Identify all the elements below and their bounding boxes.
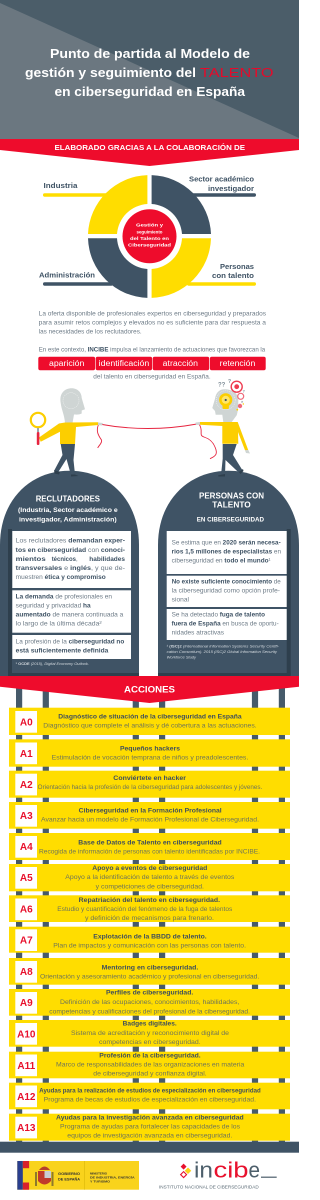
label: Sector académico investigador: Sector académico bbox=[189, 175, 254, 184]
action A2 bbox=[9, 771, 290, 798]
text box: undefined profession bbox=[12, 635, 131, 659]
heading: personas con talento: TALENTO bbox=[212, 500, 251, 510]
head bbox=[60, 388, 85, 423]
action A5: Apoyo a eventos de ciberseguridad bbox=[92, 865, 207, 872]
action A8: Orientación y asesoramiento académico y profesional en ciberseguridad. bbox=[40, 974, 260, 981]
text box: growing demand: aumentado de manera continuada a bbox=[16, 612, 124, 619]
action A12 bbox=[9, 1083, 290, 1109]
action A7: Plan de impactos y comunicación con las personas con talento. bbox=[53, 942, 246, 949]
label: Sector académico investigador: investigador bbox=[208, 184, 254, 193]
figure: talent with lightbulb: ? bbox=[242, 388, 246, 394]
ladder strips behind actions bbox=[16, 686, 285, 1142]
text box: demand: muestren ética y compromiso bbox=[16, 574, 106, 581]
label: Administración bbox=[39, 271, 113, 286]
action A5 bbox=[9, 864, 290, 891]
label: Personas con talento: Personas bbox=[220, 262, 254, 271]
action A2: A2 bbox=[20, 780, 33, 791]
action A9: competencias y cualificaciones del profesional de la ciberseguridad. bbox=[49, 1008, 250, 1015]
logo: incibe bbox=[159, 1158, 277, 1191]
label: Industria: Industria bbox=[44, 181, 78, 190]
donut diagram bbox=[88, 175, 211, 298]
heading: reclutadores: RECLUTADORES bbox=[36, 494, 100, 504]
heading: reclutadores bbox=[18, 494, 118, 523]
heading: personas con talento: EN CIBERSEGURIDAD bbox=[197, 517, 264, 524]
logo: incibe: cib bbox=[214, 1158, 248, 1183]
action A7: A7 bbox=[20, 936, 33, 946]
text box: demand bbox=[12, 531, 131, 588]
action A10: Badges digitales. bbox=[123, 1021, 177, 1028]
heading: personas con talento: PERSONAS CON bbox=[199, 490, 264, 500]
action A3: Avanzar hacia un modelo de Formación Profesional de Ciberseguridad. bbox=[41, 817, 259, 824]
title: en ciberseguridad en España bbox=[54, 84, 246, 99]
footnote: ISC2: ¹ (ISC)2 (International Information Systems Security Certifi- bbox=[167, 645, 280, 649]
action A10 bbox=[9, 1020, 290, 1047]
logo: Gobierno de España: Y TURISMO bbox=[90, 1180, 111, 1184]
footnote: ISC2 bbox=[167, 645, 280, 659]
action A5: y competiciones de ciberseguridad. bbox=[96, 883, 204, 890]
intro paragraph: las necesidades de los reclutadores. bbox=[39, 329, 142, 336]
rope bbox=[97, 424, 216, 459]
text box: growing demand: lo largo de la última década² bbox=[16, 620, 102, 628]
logo: incibe: INSTITUTO NACIONAL DE CIBERSEGURIDAD bbox=[159, 1185, 259, 1191]
action A1 bbox=[9, 739, 290, 767]
action A13 bbox=[9, 1114, 290, 1141]
logo: Gobierno de España: DE ESPAÑA bbox=[58, 1176, 81, 1181]
action A7 bbox=[9, 927, 290, 953]
header background bbox=[0, 0, 299, 140]
footnote: ISC2: cation Consortium). 2015 (ISC)2 Global Information Security bbox=[167, 650, 278, 654]
text box: demand: tos en ciberseguridad con conoci- bbox=[16, 547, 125, 554]
footer band bbox=[0, 1142, 299, 1153]
heading: personas con talento bbox=[197, 490, 264, 524]
action A8: A8 bbox=[20, 967, 33, 978]
action A4: A4 bbox=[20, 842, 33, 853]
logo: Gobierno de España: GOBIERNO bbox=[58, 1172, 80, 1176]
logo: Gobierno de España: MINISTERIO bbox=[90, 1172, 108, 1176]
text box: lack of knowledge bbox=[167, 576, 287, 607]
figure: talent with lightbulb: ? bbox=[228, 379, 231, 385]
label: Personas con talento: con talento bbox=[212, 271, 254, 280]
label: Administración: Administración bbox=[39, 271, 95, 280]
text box: talent drain: fuera de España en busca de oportu- bbox=[172, 621, 279, 628]
text box: talent drain: Se ha detectado fuga de talento bbox=[172, 612, 265, 618]
action A8 bbox=[9, 958, 290, 985]
text box: talent drain bbox=[167, 609, 287, 640]
intro paragraph: para asumir retos complejos y elevados no es suficiente para dar respuesta a bbox=[39, 320, 267, 327]
logo: incibe: in bbox=[194, 1158, 213, 1183]
action A10: A10 bbox=[17, 1030, 36, 1040]
action A6: Estudio y cuantificación del fenómeno de la fuga de talentos bbox=[57, 906, 232, 913]
action A5: Apoyo a la identificación de talento a través de eventos bbox=[65, 874, 234, 881]
action A1: A1 bbox=[20, 749, 33, 760]
label: Personas con talento bbox=[187, 262, 256, 286]
intro paragraph bbox=[39, 310, 267, 354]
heading: reclutadores: investigador, Administración) bbox=[19, 516, 117, 523]
action A5: A5 bbox=[20, 873, 33, 884]
lightbulb bbox=[219, 393, 232, 406]
figure: talent with lightbulb: ?? bbox=[218, 382, 226, 388]
magnifier bbox=[31, 413, 45, 427]
pills: aparición, identificación, atracción, retención: atracción bbox=[163, 359, 198, 368]
figure: talent with lightbulb: × bbox=[241, 399, 244, 404]
action A6 bbox=[9, 895, 290, 922]
pills: aparición, identificación, atracción, retención: identificación bbox=[99, 359, 149, 368]
action A3: Ciberseguridad en la Formación Profesional bbox=[79, 807, 222, 814]
text box: lack of knowledge: la ciberseguridad como opción profe- bbox=[172, 587, 280, 594]
action A11: A11 bbox=[17, 1061, 36, 1072]
action A0: Diagnóstico de situación de la ciberseguridad en España bbox=[58, 713, 242, 720]
text box: lack of knowledge: sional bbox=[172, 596, 189, 603]
intro paragraph: La oferta disponible de profesionales expertos en ciberseguridad y preparados bbox=[39, 310, 266, 317]
action A8: Mentoring en ciberseguridad. bbox=[102, 964, 199, 971]
heading: reclutadores: (Industria, Sector académico e bbox=[18, 507, 118, 514]
donut diagram: Ciberseguridad bbox=[128, 242, 171, 247]
action A0: A0 bbox=[20, 717, 33, 728]
action A9: Definición de las ocupaciones, conocimientos, habilidades, bbox=[60, 999, 240, 1006]
banner: collaboration: ELABORADO GRACIAS A LA COLABORACIÓN DE bbox=[54, 143, 245, 152]
title bbox=[25, 46, 274, 99]
text box: undefined profession: La profesión de la ciberseguridad no bbox=[16, 638, 124, 645]
text box: growing demand: seguridad y privacidad ha bbox=[16, 603, 91, 610]
torso and arms bbox=[200, 422, 248, 450]
panel: reclutadores bbox=[0, 471, 139, 676]
action A9: A9 bbox=[20, 998, 33, 1009]
text box: talent drain: nidades atractivas bbox=[172, 630, 224, 637]
pills: aparición, identificación, atracción, retención: retención bbox=[220, 359, 255, 368]
action A1: Estimulación de vocación temprana de niños y preadolescentes. bbox=[52, 754, 249, 761]
text box: 2020 estimate: ciberseguridad en todo el mundo¹ bbox=[172, 558, 271, 565]
logo: Gobierno de España: DE INDUSTRIA, ENERGÍA bbox=[90, 1175, 136, 1180]
action A0: Diagnóstico que complete el análisis y dé cobertura a las actuaciones. bbox=[43, 723, 257, 730]
panel: personas con talento bbox=[158, 471, 299, 676]
action A4: Recogida de información de personas con talento identificadas por INCIBE. bbox=[39, 849, 260, 856]
donut diagram: del Talento en bbox=[130, 236, 169, 241]
title: gestión y seguimiento del bbox=[25, 65, 196, 80]
logo: incibe: e bbox=[248, 1158, 260, 1183]
thought icons bbox=[231, 381, 242, 392]
banner: acciones: ACCIONES bbox=[124, 684, 175, 695]
footnote: OCDE: ¹ OCDE (2015), Digital Economy Outlook. bbox=[16, 662, 89, 666]
logo: Gobierno de España bbox=[17, 1161, 139, 1190]
head bbox=[212, 389, 238, 422]
title: TALENTO bbox=[200, 65, 274, 80]
action A2: Orientación hacia la profesión de la ciberseguridad para adolescentes y jóvenes. bbox=[38, 784, 263, 791]
text box: demand: transversales e inglés , y que de- bbox=[16, 565, 125, 572]
legs bbox=[54, 444, 75, 475]
action A11 bbox=[9, 1052, 290, 1078]
action A3 bbox=[9, 802, 290, 829]
closing sentence: del talento en ciberseguridad en España. bbox=[93, 374, 211, 381]
text box: demand: mientos bbox=[16, 556, 46, 563]
action A12: Ayudas para la realización de estudios de especialización en ciberseguridad bbox=[39, 1088, 261, 1095]
text box: 2020 estimate: Se estima que en 2020 serán necesa- bbox=[172, 539, 281, 546]
action A6: y definición de mecanismos para frenarlo. bbox=[85, 915, 214, 922]
legs bbox=[221, 444, 242, 475]
figure: recruiter with magnifier bbox=[31, 388, 103, 476]
pills: aparición, identificación, atracción, retención bbox=[38, 357, 266, 370]
text box: 2020 estimate bbox=[167, 531, 287, 574]
torso and arms bbox=[39, 422, 98, 444]
text box: 2020 estimate: rios 1,5 millones de especialistas en bbox=[172, 549, 281, 556]
action A6: A6 bbox=[20, 904, 33, 916]
text box: demand: Los reclutadores demandan exper- bbox=[16, 538, 125, 545]
action A4 bbox=[9, 833, 290, 860]
icon: coat of arms bbox=[35, 1166, 54, 1186]
action A12: Programa de becas de estudios de especialización en ciberseguridad. bbox=[44, 1097, 256, 1104]
label: Sector académico investigador bbox=[187, 175, 256, 197]
action A10: Sistema de acreditación y reconocimiento digital de bbox=[71, 1030, 230, 1037]
donut diagram: seguimiento bbox=[136, 229, 163, 234]
banner: acciones bbox=[0, 676, 299, 703]
action A3: A3 bbox=[20, 811, 33, 822]
action A1: Pequeños hackers bbox=[120, 745, 181, 752]
title: Punto de partida al Modelo de bbox=[50, 46, 250, 61]
action A11: de ciberseguridad y confianza digital. bbox=[93, 1071, 207, 1078]
action A11: Profesión de la ciberseguridad. bbox=[99, 1052, 201, 1059]
action A13: A13 bbox=[17, 1123, 36, 1134]
label: Industria bbox=[43, 181, 113, 197]
donut diagram: Gestión y bbox=[136, 223, 163, 228]
action A9: Perfiles de ciberseguridad. bbox=[106, 990, 194, 997]
banner: collaboration bbox=[0, 139, 299, 166]
pills: aparición, identificación, atracción, retención: aparición bbox=[49, 359, 84, 368]
action A11: Marco de responsabilidades de las organizaciones en materia bbox=[56, 1062, 245, 1069]
action A13: equipos de investigación avanzada en ciberseguridad. bbox=[67, 1133, 233, 1140]
action A12: A12 bbox=[17, 1092, 36, 1103]
text box: growing demand: La demanda de profesionales en bbox=[16, 594, 113, 600]
action A0 bbox=[9, 708, 290, 735]
action A13: Programa de ayudas para fortalecer las capacidades de los bbox=[60, 1123, 240, 1130]
text box: undefined profession: está suficientemente definida bbox=[16, 647, 109, 654]
action A2: Conviértete en hacker bbox=[113, 775, 187, 782]
footnote: ISC2: Workforce Study bbox=[167, 655, 197, 659]
action A4: Base de Datos de Talento en ciberseguridad bbox=[78, 840, 222, 847]
text box: demand: técnicos, bbox=[52, 556, 78, 563]
figure: talent with lightbulb bbox=[196, 379, 250, 476]
action A13: Ayudas para la investigación avanzada en ciberseguridad bbox=[56, 1114, 244, 1121]
text box: demand: habilidades bbox=[89, 556, 125, 563]
action A7: Explotación de la BBDD de talento. bbox=[93, 933, 207, 940]
action A9 bbox=[9, 989, 290, 1016]
intro paragraph: En este contexto, INCIBE impulsa el lanzamiento de actuaciones que favorezcan la bbox=[39, 347, 266, 354]
text box: growing demand bbox=[12, 590, 131, 633]
action A6: Repatriación del talento en ciberseguridad. bbox=[79, 897, 220, 904]
icon: incibe diamonds bbox=[181, 1164, 191, 1178]
text box: lack of knowledge: No existe suficiente conocimiento de bbox=[172, 578, 281, 585]
action A10: competencias en ciberseguridad. bbox=[99, 1039, 201, 1046]
